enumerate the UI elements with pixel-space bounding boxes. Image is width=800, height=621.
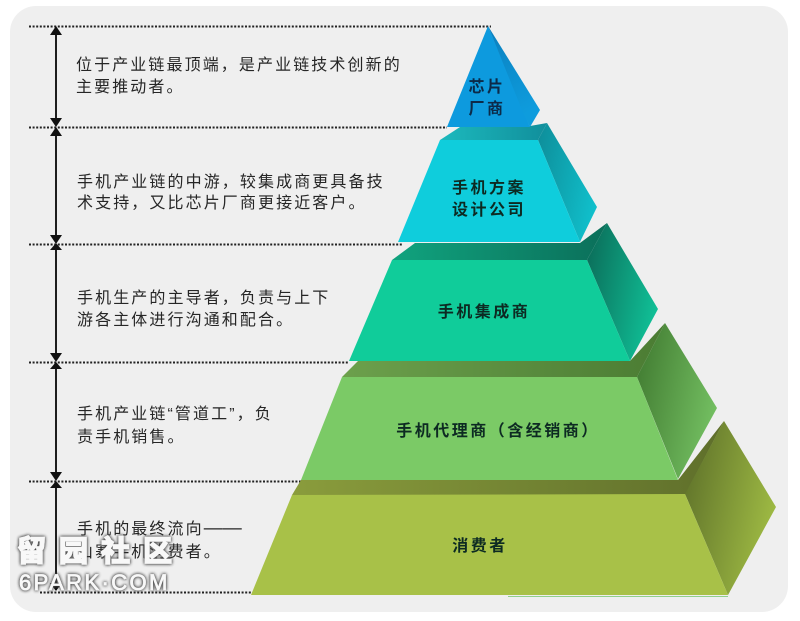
scale: dotted level lines and arrows [29, 26, 491, 592]
watermark: 6park: 6PARK·COM [19, 570, 170, 595]
text: distributors: 责手机销售。 [77, 428, 186, 446]
tier 1: chip makers: 厂商 [468, 100, 506, 118]
tier 5: consumers [251, 421, 776, 597]
tier 5: consumers: 消费者 [452, 537, 508, 555]
tier 2: design companies: 手机方案 [452, 178, 526, 197]
double-headed arrows [50, 26, 62, 591]
tier 3: integrators [349, 223, 658, 361]
text: chip makers: 位于产业链最顶端，是产业链技术创新的 [76, 57, 402, 74]
tier 1: chip makers [447, 26, 540, 127]
text: chip makers: 主要推动者。 [76, 78, 185, 96]
text: distributors: 手机产业链“管道工”，负 [77, 406, 273, 423]
dotted level lines [29, 26, 491, 592]
pyramid [251, 26, 776, 597]
tier 1: chip makers: 芯片 [468, 78, 506, 96]
tier 3: integrators: 手机集成商 [438, 302, 530, 321]
text: integrators: 手机生产的主导者，负责与上下 [77, 290, 330, 307]
text: consumers: 手机的最终流向—— [77, 518, 242, 539]
text: design companies: 手机产业链的中游，较集成商更具备技 [77, 174, 385, 191]
description texts [76, 56, 402, 561]
text: design companies: 术支持，又比芯片厂商更接近客户。 [77, 194, 367, 212]
text: integrators: 游各主体进行沟通和配合。 [77, 311, 294, 329]
watermark: 6park [17, 528, 185, 595]
watermark: 6park: 留园社区 [17, 528, 185, 570]
tier 4: distributors [301, 323, 717, 480]
text: consumers: 山寨手机消费者。 [77, 543, 222, 561]
tier 2: design companies: 设计公司 [452, 201, 526, 219]
tier 2: design companies [398, 123, 597, 242]
tier 4: distributors: 手机代理商（含经销商） [396, 421, 600, 440]
